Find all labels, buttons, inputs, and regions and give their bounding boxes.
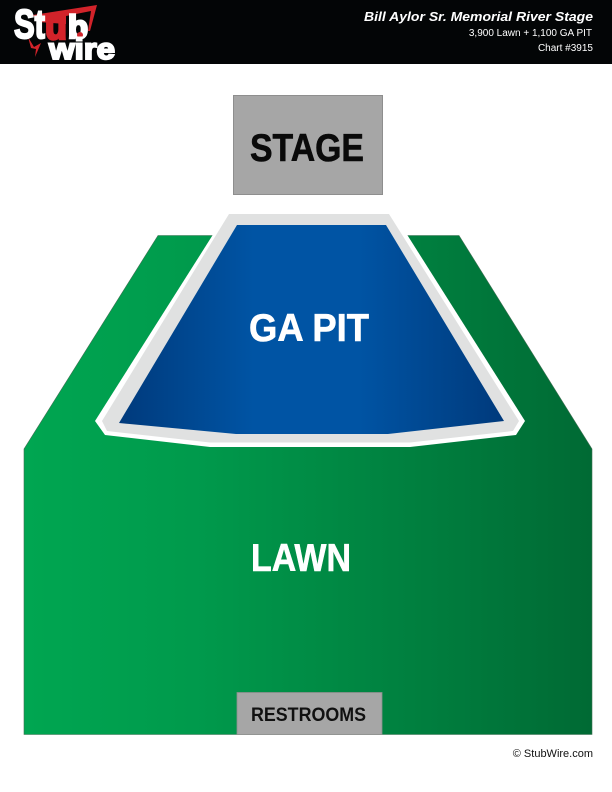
pit blue floor: [119, 225, 504, 434]
pit label: GA PIT: [249, 307, 369, 350]
pit white border: [95, 214, 525, 447]
pit gray walkway: [102, 214, 519, 442]
restrooms block: [237, 692, 382, 734]
copyright: © StubWire.com: [513, 748, 593, 760]
stage block: [234, 96, 382, 194]
logo: StubWire: wire: [48, 33, 115, 66]
GA pit section: [95, 214, 525, 447]
logo: StubWire: b: [68, 9, 88, 45]
logo: StubWire: [14, 1, 115, 66]
capacity: 3,900 Lawn + 1,100 GA PIT: [469, 28, 592, 39]
lawn label: LAWN: [251, 537, 351, 580]
logo: StubWire: St: [14, 1, 45, 47]
venue title: Bill Aylor Sr. Memorial River Stage: [364, 9, 593, 24]
restrooms label: RESTROOMS: [251, 704, 366, 726]
header bar: [0, 0, 612, 66]
chart number: Chart #3915: [538, 43, 593, 54]
stage label: STAGE: [250, 127, 364, 170]
logo: StubWire: u: [45, 6, 67, 48]
